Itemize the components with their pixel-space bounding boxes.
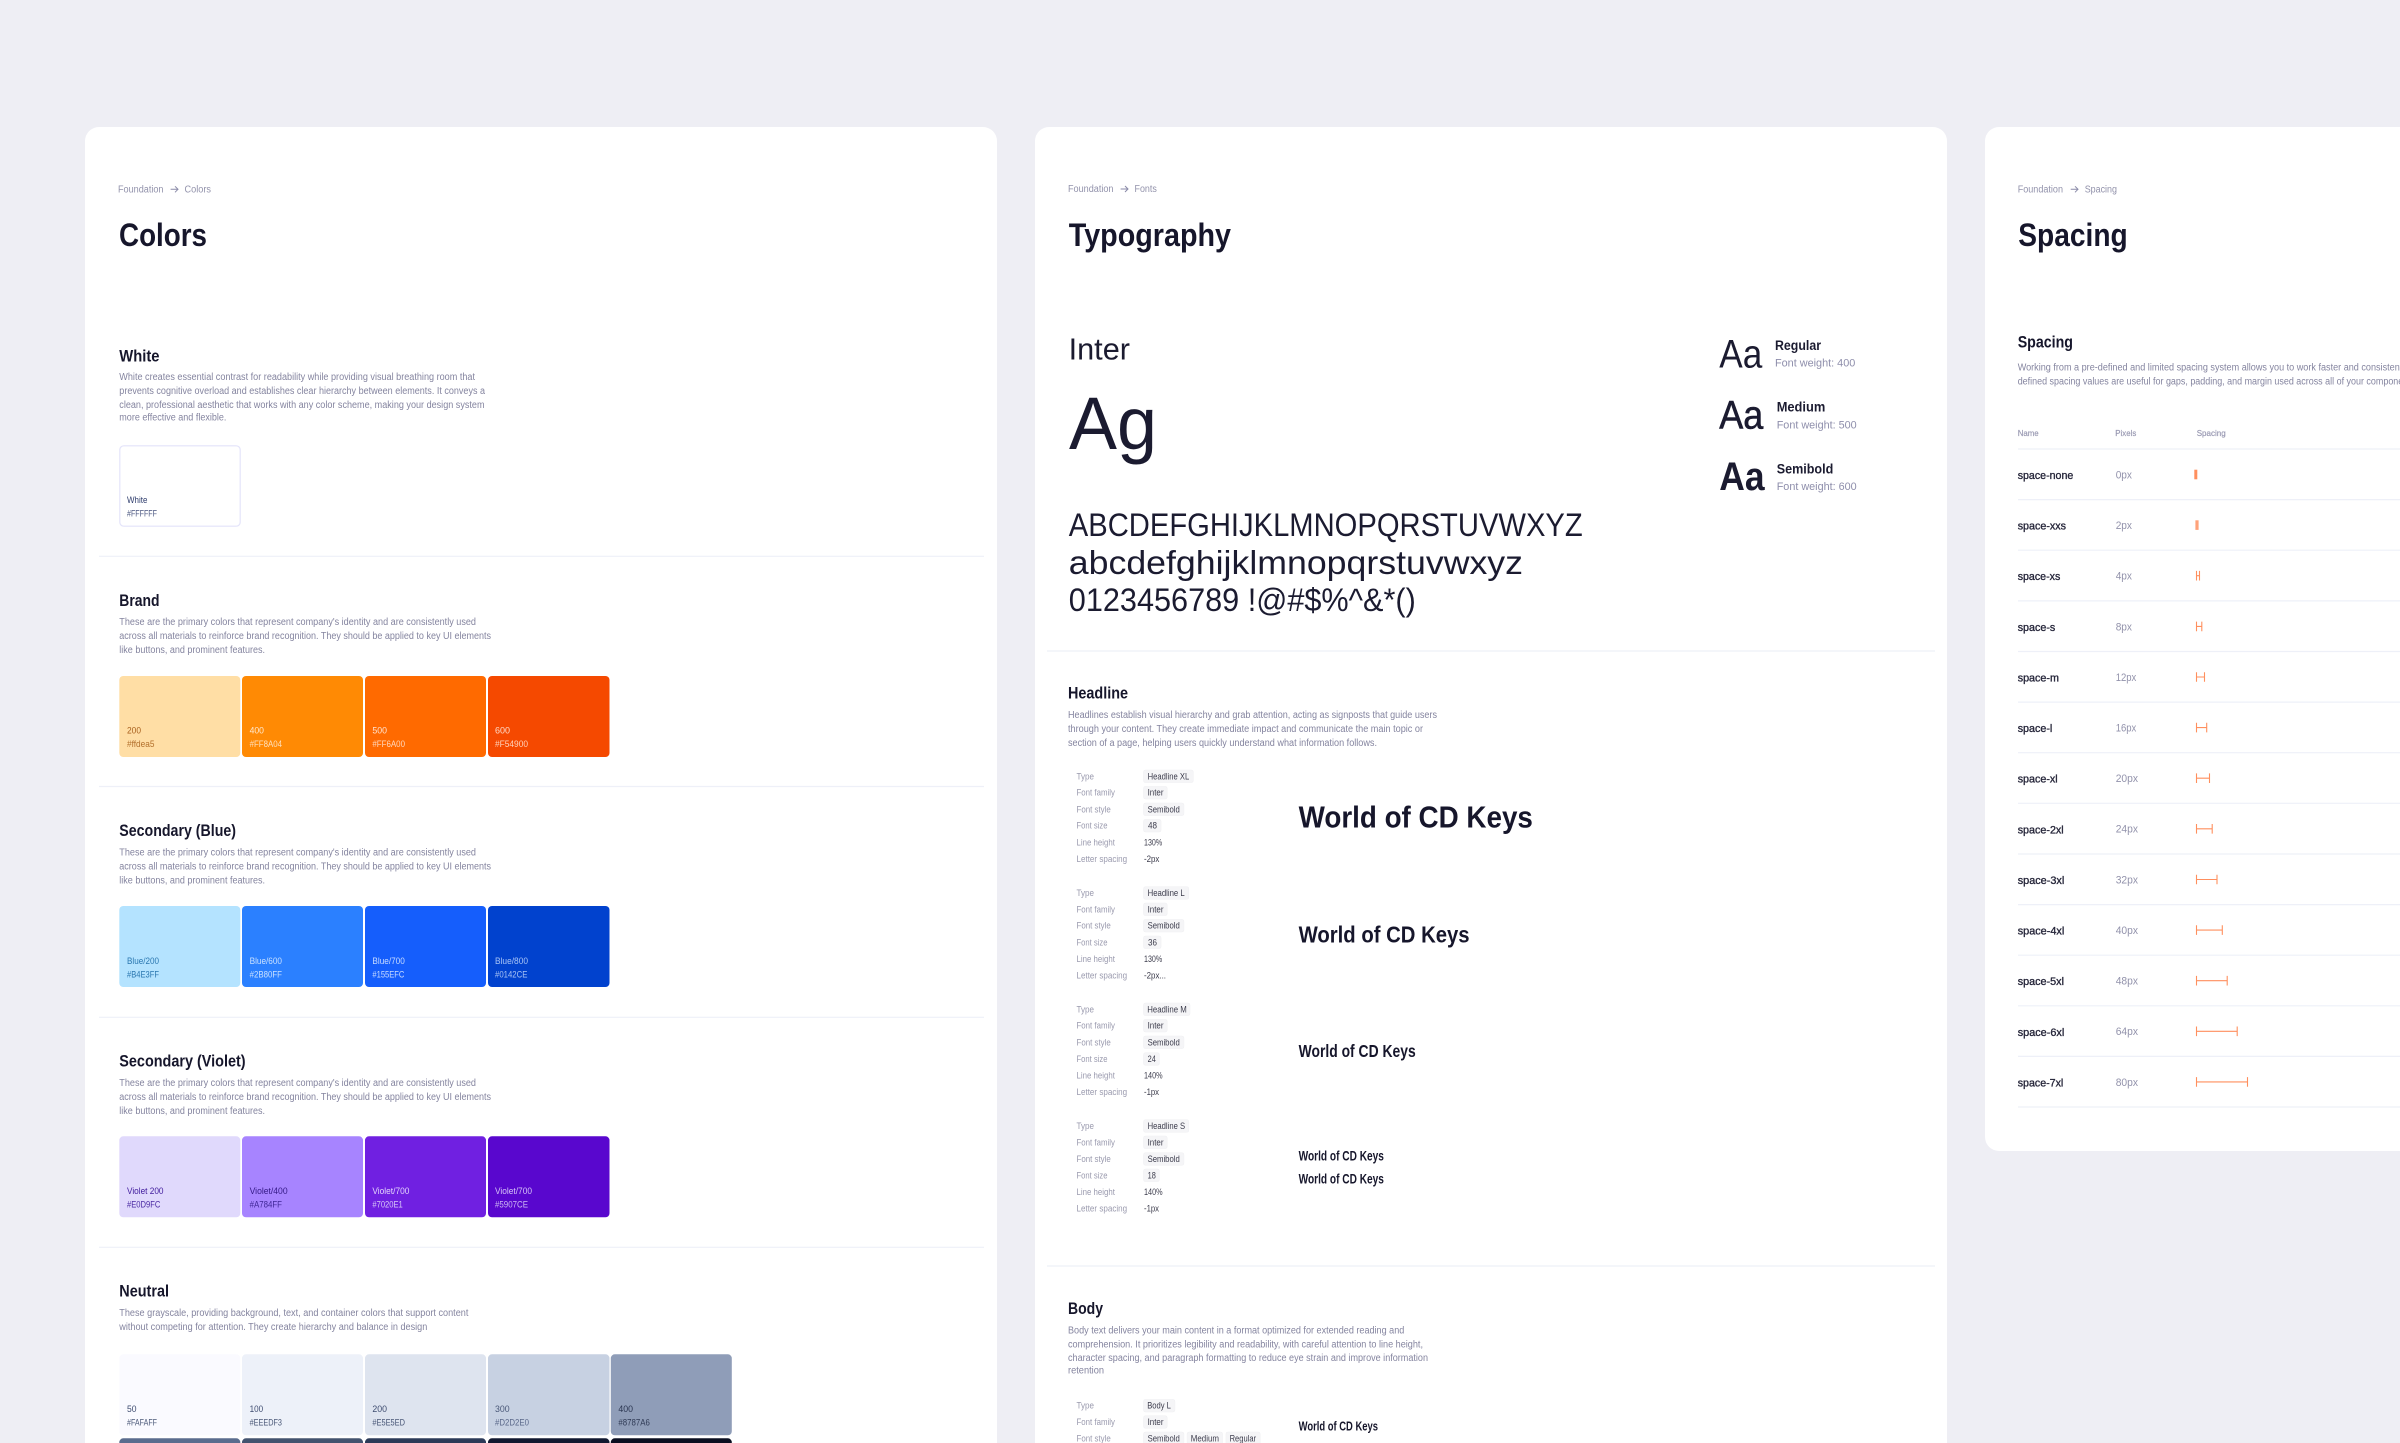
spec table: headline M: 140% <box>1144 1070 1163 1080</box>
swatch: white: White <box>127 495 147 505</box>
swatch: neutral 200 <box>365 1354 486 1435</box>
description: secondary blue: across all materials to reinforce brand recognition. They should be applied to key UI elements <box>119 862 491 872</box>
swatch: brand 400: #FF8A04 <box>250 739 282 749</box>
row: space-3xl <box>2018 874 2217 887</box>
font weight: regular: Regular <box>1775 338 1822 353</box>
swatch: blue 600 <box>242 906 363 987</box>
swatch: violet 400: Violet/400 <box>250 1186 288 1196</box>
row: space-s: space-s <box>2018 622 2056 634</box>
heading: neutral: Neutral <box>119 1282 169 1301</box>
swatch: brand 200: #ffdea5 <box>127 739 154 749</box>
type sample: headline S: World of CD Keys <box>1299 1171 1384 1187</box>
type sample: headline XL: World of CD Keys <box>1299 801 1533 835</box>
description: neutral: without competing for attention. They create hierarchy and balance in design <box>118 1322 427 1333</box>
spec table: headline M: Headline M <box>1147 1004 1187 1014</box>
swatch: neutral 200: #E5E5ED <box>372 1418 405 1428</box>
spec table: body L: Font family <box>1076 1417 1115 1427</box>
section: secondary violet <box>119 1052 610 1217</box>
spec table: headline M: Line height <box>1076 1070 1115 1080</box>
row: space-xs <box>2018 571 2200 583</box>
table header <box>2018 428 2226 438</box>
spec table: headline M: Type <box>1076 1004 1094 1014</box>
font weight: medium: Aa <box>1719 393 1764 437</box>
spec table: headline XL: Font family <box>1076 788 1115 798</box>
swatch: blue 700: Blue/700 <box>372 956 405 966</box>
swatch: neutral 100: 100 <box>250 1404 263 1414</box>
spec table: headline M: Inter <box>1148 1021 1164 1031</box>
table header: Name <box>2018 428 2039 438</box>
spec table: headline M: Letter spacing <box>1076 1087 1127 1097</box>
panel: colors <box>85 127 997 1443</box>
description: headline: through your content. They create immediate impact and communicate the main topic or <box>1068 724 1424 735</box>
spec table: headline S: Line height <box>1076 1187 1115 1197</box>
spacing table <box>2018 428 2400 1107</box>
swatch: neutral 200: 200 <box>372 1404 387 1414</box>
row: space-l: space-l <box>2018 723 2052 735</box>
description: white: White creates essential contrast for readability while providing visual breathing room that <box>119 372 475 383</box>
spec table: headline XL: Headline XL <box>1148 771 1189 781</box>
section: neutral <box>118 1282 732 1443</box>
row: space-7xl: space-7xl <box>2018 1077 2063 1089</box>
swatch: neutral 50 <box>119 1354 240 1435</box>
spec table: headline L <box>1076 887 1189 980</box>
description: body: Body text delivers your main content in a format optimized for extended reading and <box>1068 1326 1404 1336</box>
swatch row: neutral dark tones <box>119 1438 732 1443</box>
spec table: headline XL: Letter spacing <box>1076 854 1127 864</box>
spec table: headline S: Font family <box>1076 1137 1115 1147</box>
spec table: body L: Inter <box>1148 1417 1164 1427</box>
row: space-none <box>2018 469 2197 482</box>
swatch: neutral 100 <box>242 1354 363 1435</box>
breadcrumb: colors: Foundation <box>118 184 164 195</box>
swatch: blue 800 <box>488 906 610 987</box>
spec table: headline S: 140% <box>1144 1187 1163 1197</box>
spec table: headline XL <box>1076 770 1193 864</box>
swatch: brand 600 <box>488 676 610 757</box>
spec table: headline M: Semibold <box>1148 1037 1180 1047</box>
spec table: body L: Body L <box>1147 1401 1171 1411</box>
swatch: blue 200: #B4E3FF <box>127 970 159 980</box>
row: space-m: space-m <box>2018 672 2059 684</box>
spec table: headline M: Font style <box>1076 1037 1111 1047</box>
swatch: blue 600: #2B80FF <box>250 970 282 980</box>
row: space-l: 16px <box>2116 722 2137 734</box>
swatch: brand 400: 400 <box>250 726 264 736</box>
font weight: medium: Font weight: 500 <box>1777 419 1857 431</box>
swatch: blue 200: Blue/200 <box>127 956 159 966</box>
spec table: body L: Type <box>1076 1401 1094 1411</box>
font weight: regular: Aa <box>1719 332 1763 376</box>
description: secondary violet <box>119 1078 491 1117</box>
type sample: headline L: World of CD Keys <box>1299 922 1470 948</box>
font weight: semibold <box>1719 455 1857 499</box>
font weight: regular: Font weight: 400 <box>1775 358 1855 370</box>
section: body <box>1068 1299 1428 1443</box>
font weight: semibold: Semibold <box>1777 461 1833 476</box>
description: body: character spacing, and paragraph formatting to reduce eye strain and improve information <box>1068 1353 1428 1364</box>
description: spacing <box>2018 363 2400 388</box>
row: space-5xl: 48px <box>2116 976 2138 988</box>
breadcrumb: colors <box>118 184 211 195</box>
description: secondary blue <box>119 848 491 886</box>
font weight: regular <box>1719 332 1855 376</box>
row: space-2xl: 24px <box>2116 824 2138 836</box>
description: white: prevents cognitive overload and establishes clear hierarchy between elements. It conveys a <box>119 386 485 397</box>
heading: secondary violet: Secondary (Violet) <box>119 1052 246 1070</box>
swatch: violet 700: #7020E1 <box>372 1200 403 1210</box>
heading: headline: Headline <box>1068 683 1128 702</box>
spec table: headline L: Headline L <box>1148 888 1185 898</box>
row: space-xs: space-xs <box>2018 571 2061 583</box>
spec table: headline L: 130% <box>1144 954 1162 964</box>
type sample: headline S: World of CD Keys <box>1299 1148 1384 1164</box>
panel: typography <box>1035 127 1947 1443</box>
description: secondary violet: across all materials to reinforce brand recognition. They should be applied to key UI elements <box>119 1092 491 1103</box>
heading: body: Body <box>1068 1299 1103 1318</box>
spec table: headline M: -1px <box>1144 1087 1159 1097</box>
spec table: headline S: Letter spacing <box>1076 1203 1127 1213</box>
section: brand <box>119 591 610 757</box>
spec table: headline S: -1px <box>1144 1203 1159 1213</box>
swatch: brand 600: 600 <box>495 726 510 736</box>
title: colors: Colors <box>119 217 207 253</box>
row: space-3xl: 32px <box>2116 874 2138 886</box>
swatch: violet 200: Violet 200 <box>127 1186 164 1196</box>
spec table: headline L: Font family <box>1076 904 1115 914</box>
spec table: headline S: Type <box>1076 1121 1094 1131</box>
swatch: neutral 300: 300 <box>495 1404 510 1414</box>
font specimen: Inter <box>1069 332 1583 618</box>
title: typography: Typography <box>1069 217 1231 253</box>
row: space-2xl <box>2018 824 2212 836</box>
spec table: headline L: 36 <box>1148 937 1157 947</box>
swatch: brand 200 <box>119 676 240 757</box>
spec table: headline XL: Type <box>1076 771 1094 781</box>
breadcrumb: fonts: Foundation <box>1068 184 1114 195</box>
heading: secondary blue: Secondary (Blue) <box>119 821 236 840</box>
swatch: neutral 50: 50 <box>127 1404 136 1414</box>
swatch: neutral 400 <box>611 1354 732 1435</box>
swatch: blue 700 <box>365 906 486 987</box>
swatch: violet 700 dark: Violet/700 <box>495 1186 532 1196</box>
breadcrumb: colors: Colors <box>184 184 211 195</box>
row: space-none: space-none <box>2018 470 2073 482</box>
row: space-4xl <box>2018 925 2222 938</box>
row: space-2xl: space-2xl <box>2018 824 2064 836</box>
swatch: blue 200 <box>119 906 240 987</box>
swatch: violet 200 <box>119 1136 240 1217</box>
breadcrumb: spacing <box>2018 184 2117 195</box>
row: space-5xl <box>2018 976 2227 988</box>
spec table: headline XL: 130% <box>1144 837 1162 847</box>
font name: Inter <box>1069 332 1130 366</box>
type sample: headline S <box>1299 1148 1384 1187</box>
row: space-xxs <box>2018 520 2199 533</box>
description: headline <box>1068 710 1437 749</box>
swatch: violet 200: #E0D9FC <box>127 1200 161 1210</box>
spec table: headline XL: Font style <box>1076 804 1111 814</box>
swatch: blue 800: #0142CE <box>495 970 527 980</box>
swatch: neutral 400: #8787A6 <box>618 1418 650 1428</box>
swatch: blue 800: Blue/800 <box>495 956 528 966</box>
row: space-5xl: space-5xl <box>2018 976 2064 988</box>
heading: spacing section: Spacing <box>2018 332 2073 351</box>
font weight: medium: Medium <box>1777 400 1825 415</box>
glyph sample: Ag: Ag <box>1069 382 1157 465</box>
row: space-xxs: 2px <box>2116 520 2132 532</box>
description: brand: These are the primary colors that represent company's identity and are consistently used <box>119 617 476 628</box>
spec table: headline L: Font size <box>1076 937 1108 947</box>
spec table: headline XL: Line height <box>1076 837 1115 847</box>
description: white: clean, professional aesthetic that works with any color scheme, making your design system <box>119 400 485 411</box>
swatch: neutral 300 <box>488 1354 610 1435</box>
swatch: brand 500: 500 <box>372 726 387 736</box>
swatch: blue 600: Blue/600 <box>250 956 282 966</box>
spec table: headline XL: Semibold <box>1148 804 1180 814</box>
row: space-6xl: space-6xl <box>2018 1027 2064 1039</box>
spec table: headline XL: Font size <box>1076 821 1108 831</box>
swatch: neutral 300: #D2D2E0 <box>495 1418 529 1428</box>
swatch: brand 400 <box>242 676 363 757</box>
row: space-6xl: 64px <box>2116 1026 2138 1038</box>
spec table: headline L: Line height <box>1076 954 1115 964</box>
row: space-s: 8px <box>2116 621 2132 633</box>
type sample: body L: World of CD Keys <box>1299 1419 1378 1434</box>
row: space-4xl: space-4xl <box>2018 926 2064 938</box>
numerals and symbols: 0123456789 !@#$%^&*() <box>1069 582 1416 618</box>
description: body: comprehension. It prioritizes legibility and readability, with careful attention to line height, <box>1068 1340 1423 1350</box>
swatch: neutral 400: 400 <box>618 1404 633 1414</box>
description: white: more effective and flexible. <box>119 412 226 424</box>
description: headline: Headlines establish visual hierarchy and grab attention, acting as signposts that guide users <box>1068 710 1437 721</box>
spec table: headline L: Letter spacing <box>1076 970 1127 980</box>
spec table: headline M: Font size <box>1076 1054 1108 1064</box>
breadcrumb: fonts: Fonts <box>1134 184 1157 195</box>
description: secondary blue: These are the primary colors that represent company's identity and are consistently used <box>119 848 476 858</box>
swatch: brand 500: #FF6A00 <box>372 739 405 749</box>
spec table: headline L: Type <box>1076 888 1094 898</box>
spec table: headline L: Semibold <box>1148 921 1180 931</box>
row: space-m: 12px <box>2116 672 2137 684</box>
row: space-7xl <box>2018 1077 2248 1089</box>
heading: white: White <box>119 347 160 366</box>
spec table: headline L: Inter <box>1148 904 1164 914</box>
row: space-s <box>2018 621 2202 634</box>
type sample: headline M: World of CD Keys <box>1299 1041 1416 1061</box>
description: body: retention <box>1068 1366 1104 1377</box>
spec table: headline XL: -2px <box>1144 854 1160 864</box>
breadcrumb: spacing: Foundation <box>2018 184 2063 195</box>
row: space-l <box>2018 722 2207 735</box>
alphabet: uppercase: ABCDEFGHIJKLMNOPQRSTUVWXYZ <box>1069 507 1583 543</box>
swatch: brand 500 <box>365 676 486 757</box>
title: spacing: Spacing <box>2018 217 2128 253</box>
swatch: brand 600: #F54900 <box>495 739 528 749</box>
spec table: body L <box>1076 1399 1260 1443</box>
row: space-4xl: 40px <box>2116 925 2138 937</box>
spec table: headline S: Font style <box>1076 1154 1111 1164</box>
section: white <box>119 347 485 526</box>
spec table: headline S <box>1076 1120 1189 1213</box>
swatch: neutral 50: #FAFAFF <box>127 1418 157 1428</box>
swatch: violet 700 dark <box>488 1136 610 1217</box>
swatch: violet 700: Violet/700 <box>372 1186 409 1196</box>
row: space-xl: 20px <box>2116 773 2138 785</box>
spec table: headline XL: Inter <box>1148 788 1164 798</box>
spec table: headline L: Font style <box>1076 921 1111 931</box>
description: secondary blue: like buttons, and prominent features. <box>119 876 265 886</box>
swatch: violet 700 <box>365 1136 486 1217</box>
spec table: headline S: Headline S <box>1148 1121 1185 1131</box>
description: secondary violet: These are the primary colors that represent company's identity and are consistently used <box>119 1078 476 1089</box>
font weight: semibold: Aa <box>1719 455 1765 499</box>
description: neutral: These grayscale, providing background, text, and container colors that support content <box>119 1308 469 1319</box>
spec table: headline S: Inter <box>1148 1137 1164 1147</box>
spec table: headline S: Semibold <box>1148 1154 1180 1164</box>
swatch: white <box>120 446 240 526</box>
row: space-7xl: 80px <box>2116 1077 2138 1089</box>
swatch: neutral 100: #EEEDF3 <box>250 1418 282 1428</box>
spec table: headline S: Font size <box>1076 1170 1108 1180</box>
description: secondary violet: like buttons, and prominent features. <box>119 1106 265 1117</box>
section: headline <box>1068 683 1533 1213</box>
row: space-6xl <box>2018 1026 2237 1039</box>
table header: Spacing <box>2197 428 2226 438</box>
spec table: headline M: Font family <box>1076 1021 1115 1031</box>
font weight: medium <box>1719 393 1857 437</box>
row: space-m <box>2018 672 2204 684</box>
swatch: brand 200: 200 <box>127 726 141 736</box>
spec table: headline L: -2px... <box>1144 970 1166 980</box>
description: brand: like buttons, and prominent features. <box>119 645 265 656</box>
row: space-3xl: space-3xl <box>2018 875 2064 887</box>
description: neutral <box>118 1308 469 1333</box>
row: space-none: 0px <box>2116 469 2132 481</box>
row: space-xs: 4px <box>2116 571 2132 583</box>
spec table: headline M: 24 <box>1148 1054 1156 1064</box>
breadcrumb: spacing: Spacing <box>2085 184 2117 195</box>
table header: Pixels <box>2115 428 2136 438</box>
swatch: blue 700: #155EFC <box>372 970 405 980</box>
section: secondary blue <box>119 821 610 987</box>
row: space-xxs: space-xxs <box>2018 521 2066 533</box>
spec table: headline M <box>1076 1003 1190 1097</box>
heading: brand: Brand <box>119 591 160 610</box>
swatch: violet 400: #A784FF <box>250 1200 282 1210</box>
swatch: white: #FFFFFF <box>127 508 157 518</box>
swatch: violet 400 <box>242 1136 363 1217</box>
swatch: violet 700 dark: #5907CE <box>495 1200 528 1210</box>
spec table: headline S: 18 <box>1148 1170 1156 1180</box>
description: headline: section of a page, helping users quickly understand what information follows. <box>1068 738 1377 749</box>
row: space-xl: space-xl <box>2018 774 2058 786</box>
description: white <box>119 372 485 424</box>
font weight: semibold: Font weight: 600 <box>1777 481 1857 493</box>
alphabet: lowercase: abcdefghijklmnopqrstuvwxyz <box>1069 544 1523 581</box>
description: body <box>1068 1326 1428 1377</box>
panel: spacing <box>1985 127 2400 1151</box>
breadcrumb: fonts <box>1068 184 1157 195</box>
description: brand <box>119 617 491 656</box>
row: space-xl <box>2018 773 2210 786</box>
spec table: headline XL: 48 <box>1148 821 1157 831</box>
description: brand: across all materials to reinforce brand recognition. They should be applied to key UI elements <box>119 631 491 642</box>
